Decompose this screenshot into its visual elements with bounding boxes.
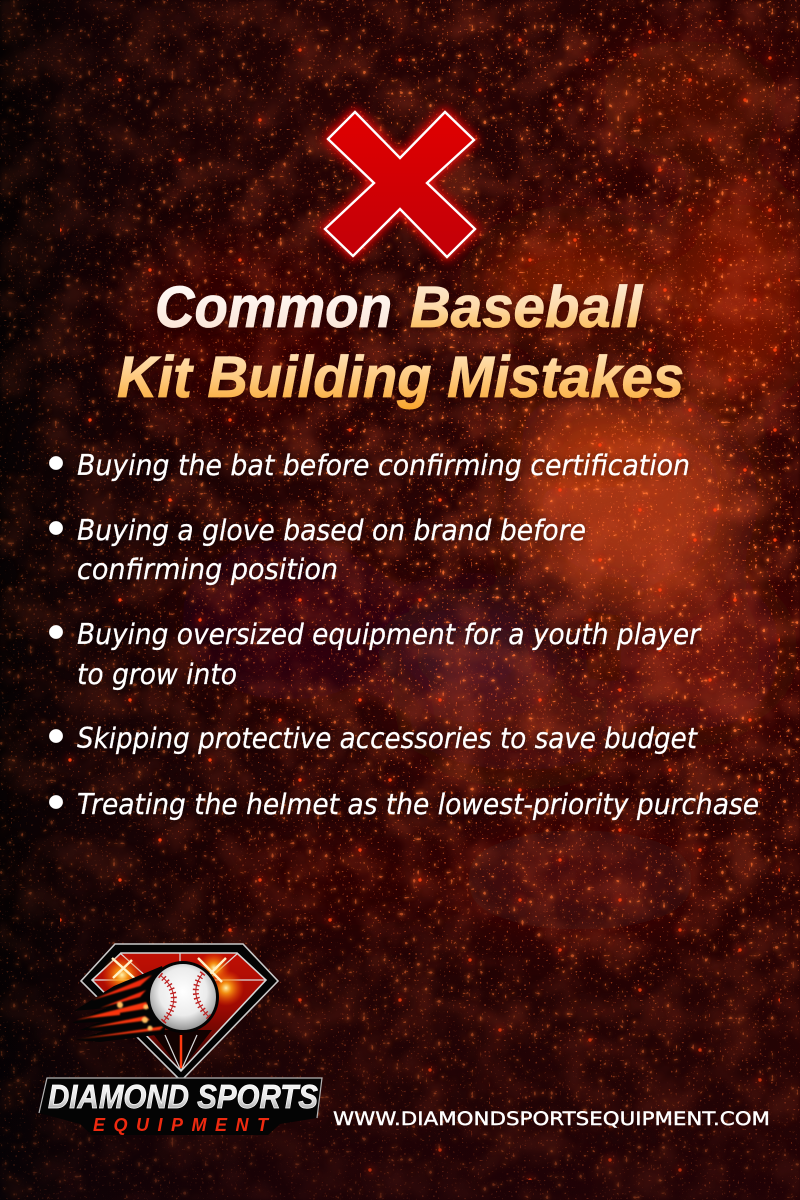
title: Kit Building Mistakes: [117, 345, 684, 410]
icon: speed streaks: [72, 966, 170, 1042]
bullet item: protective accessories: Skipping protective accessories to save budget: [77, 722, 699, 755]
website url: WWW.DIAMONDSPORTSEQUIPMENT.COM: [333, 1109, 770, 1130]
bullet item: oversized equipment: to grow into: [77, 658, 237, 691]
brand banner: [39, 1078, 322, 1135]
icon: baseball: [147, 961, 219, 1033]
bullet item: oversized equipment: [49, 618, 702, 691]
title: Baseball: [410, 275, 644, 340]
bullet item: certification: Buying the bat before confirming certification: [77, 449, 690, 482]
title: Common: [155, 275, 392, 340]
title: [117, 275, 684, 410]
brand banner: DIAMOND SPORTS: [48, 1078, 318, 1115]
icon: diamond gem: [81, 944, 278, 1081]
icon: red neon X: [325, 112, 475, 257]
mistakes list: [49, 449, 759, 821]
bullet item: glove: [49, 514, 586, 586]
bullet item: helmet: Treating the helmet as the lowest-priority purchase: [77, 788, 759, 821]
bullet item: oversized equipment: Buying oversized equipment for a youth player: [77, 618, 702, 651]
brand banner: EQUIPMENT: [93, 1115, 270, 1135]
logo: Diamond Sports Equipment: [39, 944, 322, 1135]
bullet item: glove: Buying a glove based on brand before: [77, 514, 586, 547]
bullet item: glove: confirming position: [77, 553, 338, 586]
